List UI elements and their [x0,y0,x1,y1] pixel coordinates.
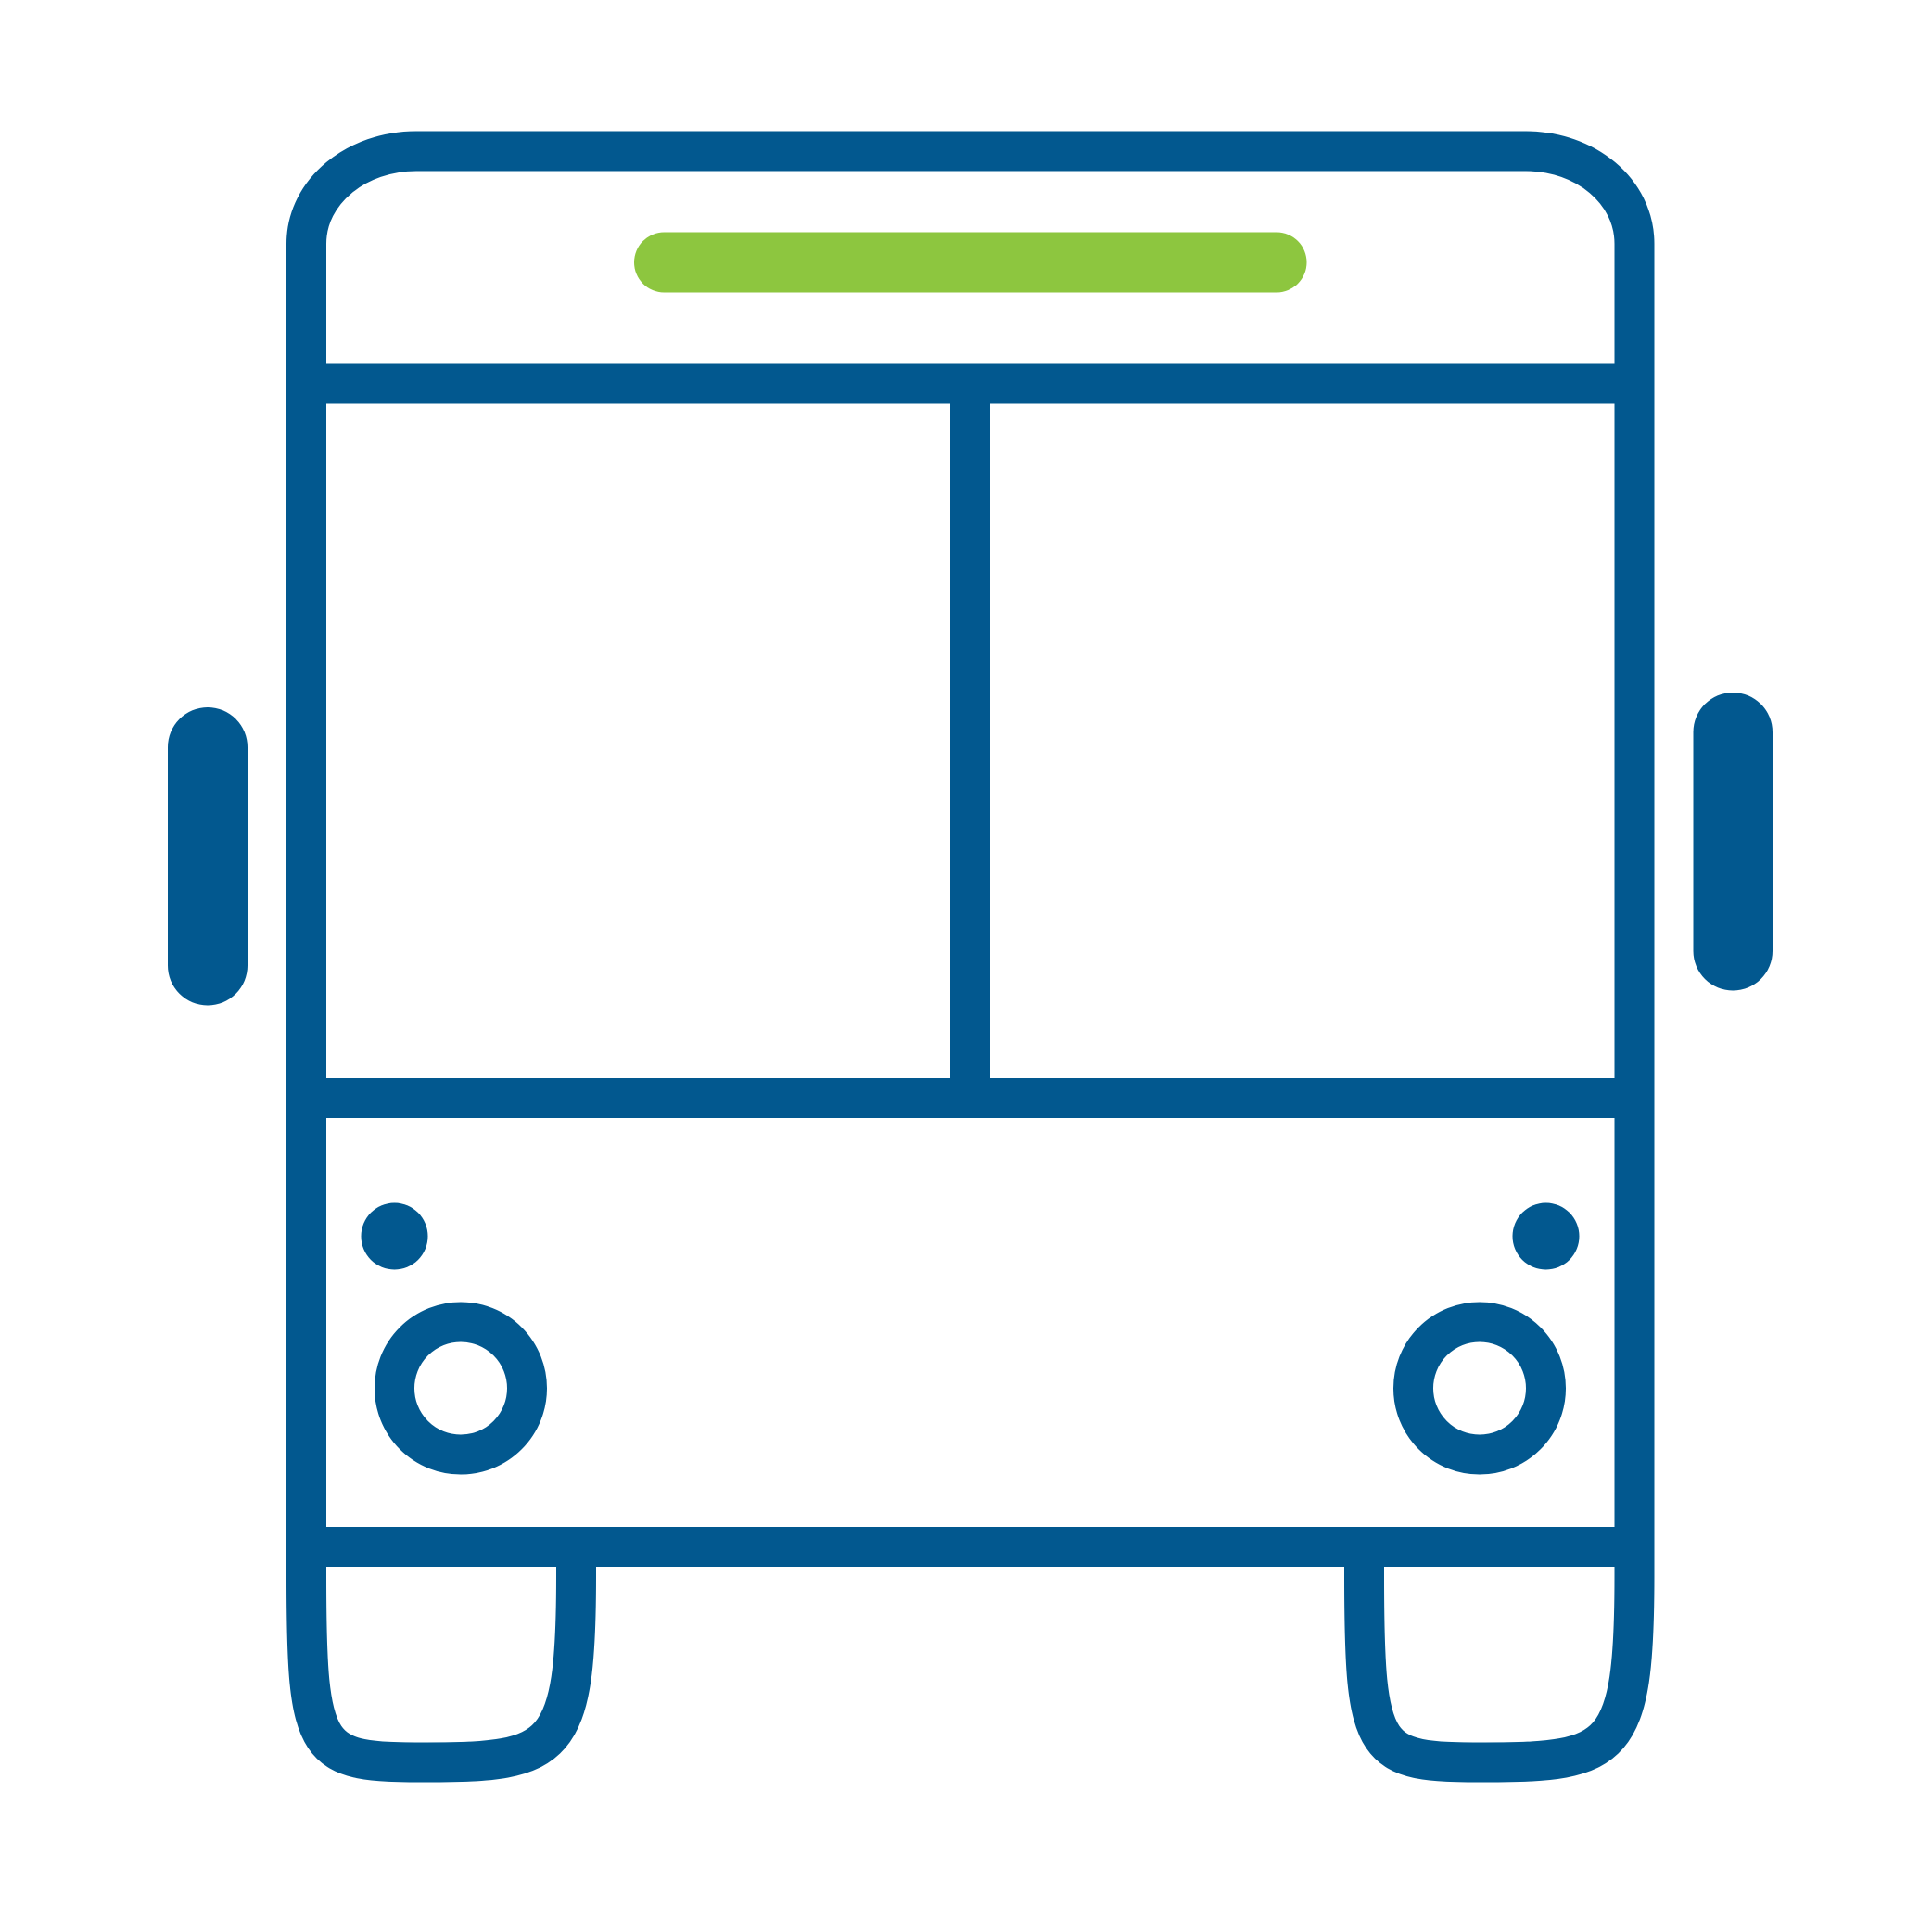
right wheel [1365,1546,1634,1762]
bus body outline [306,151,1634,1576]
right mirror [1693,693,1773,990]
right indicator light [1513,1203,1580,1270]
left indicator light [362,1203,428,1270]
right headlight [1413,1322,1546,1455]
windshield divider [950,384,990,1098]
left headlight [395,1322,527,1455]
left mirror [168,707,248,1005]
left wheel [306,1546,577,1762]
destination sign [634,232,1307,293]
